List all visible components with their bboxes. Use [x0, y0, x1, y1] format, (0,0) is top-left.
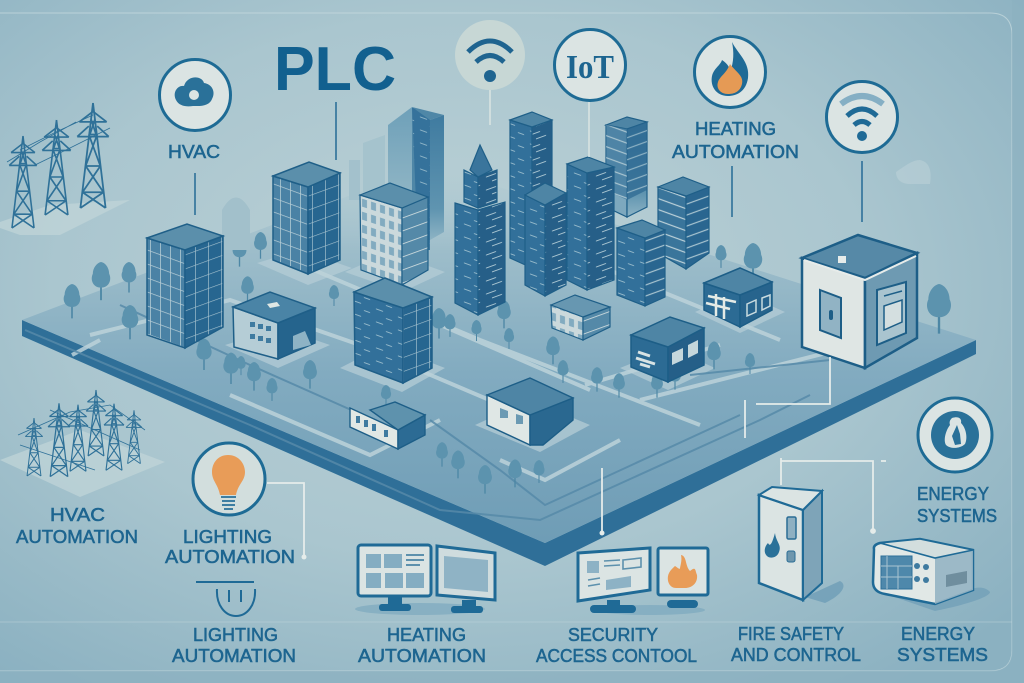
label: lighting automation lower: [172, 624, 296, 666]
label: security access control: [536, 624, 697, 666]
connector: PLC: [335, 102, 337, 160]
label: heating automation bottom: [358, 624, 486, 666]
icon: wifi right: [826, 82, 898, 152]
roads: [72, 250, 830, 480]
connector: wifi top: [489, 90, 491, 125]
icon: wifi top: [455, 20, 525, 90]
building: white low hall: [350, 402, 425, 449]
label: energy systems upper: [917, 483, 997, 526]
icon: heating flame: [694, 36, 766, 108]
label: lighting automation lower: AUTOMATION: [172, 645, 296, 666]
label: security access control: ACCESS CONTOOL: [536, 645, 697, 666]
label: heating automation: [672, 119, 799, 162]
icon: IoT: IoT: [566, 49, 614, 86]
label: HVAC automation: [16, 504, 138, 547]
cabinet wall switch: [820, 290, 841, 338]
icon: fire cabinet: [759, 487, 844, 603]
icon: socket: [196, 582, 255, 616]
label: HVAC automation: AUTOMATION: [16, 526, 138, 547]
building: back towers: [510, 112, 709, 306]
connector: HVAC: [194, 173, 196, 215]
label: fire safety and control: [731, 623, 861, 665]
label: fire safety and control: AND CONTROL: [731, 644, 861, 665]
label: lighting automation upper: [165, 526, 295, 567]
icon: light bulb: [193, 443, 265, 515]
label: fire safety and control: FIRE SAFETY: [738, 623, 844, 644]
trees: [64, 232, 951, 494]
label: energy systems bottom: SYSTEMS: [897, 644, 988, 665]
icon: security monitors: [578, 548, 708, 615]
label: energy systems bottom: [897, 623, 988, 665]
label: HVAC: HVAC: [168, 142, 220, 162]
label: heating automation bottom: AUTOMATION: [358, 645, 486, 666]
building: dark mid block: [354, 278, 432, 383]
label: energy systems upper: ENERGY: [917, 483, 989, 504]
building: white front house: [487, 378, 573, 445]
connector: security: [600, 468, 604, 536]
label: lighting automation lower: LIGHTING: [193, 624, 278, 645]
connector: lighting: [267, 483, 306, 560]
faded background towers: [222, 107, 444, 250]
label: heating automation: HEATING: [695, 119, 776, 139]
building: large control cabinet: [802, 235, 917, 368]
label: energy systems bottom: ENERGY: [901, 623, 975, 644]
label: security access control: SECURITY: [568, 624, 658, 645]
label: heating automation bottom: HEATING: [387, 624, 466, 645]
icon: energy device: [873, 539, 990, 611]
building: low office: [233, 292, 315, 359]
building: white window block: [360, 183, 428, 285]
building: dark office: [631, 317, 704, 382]
icon: power pylons top left: [0, 103, 130, 235]
icon: HVAC cloud: [160, 60, 230, 130]
label: lighting automation upper: AUTOMATION: [165, 546, 295, 567]
building: blue grid tower: [273, 162, 340, 274]
connectors: fire and energy: [745, 357, 886, 533]
label: heating automation: AUTOMATION: [672, 142, 799, 162]
icon: HMI monitors: [355, 545, 495, 615]
building: small windows: [551, 295, 610, 340]
label: energy systems upper: SYSTEMS: [917, 505, 997, 526]
pale cloud decor: [896, 160, 931, 184]
building: spire tower: [455, 145, 505, 315]
cabinet panel: [877, 282, 906, 345]
title: PLC: [274, 35, 396, 104]
connector: heating: [731, 166, 733, 217]
connector: IoT: [588, 102, 590, 157]
building: transformer house: [704, 268, 772, 327]
building: large front left tower: [147, 224, 223, 348]
label: HVAC automation: HVAC: [50, 504, 105, 525]
icon: power pylons bottom left: [0, 390, 165, 497]
platform: [22, 165, 976, 566]
connector: wifi right: [861, 161, 863, 222]
building pads: [225, 250, 785, 452]
icon: IoT: [554, 30, 626, 100]
label: lighting automation upper: LIGHTING: [183, 526, 272, 547]
icon: energy circle: [918, 398, 992, 472]
